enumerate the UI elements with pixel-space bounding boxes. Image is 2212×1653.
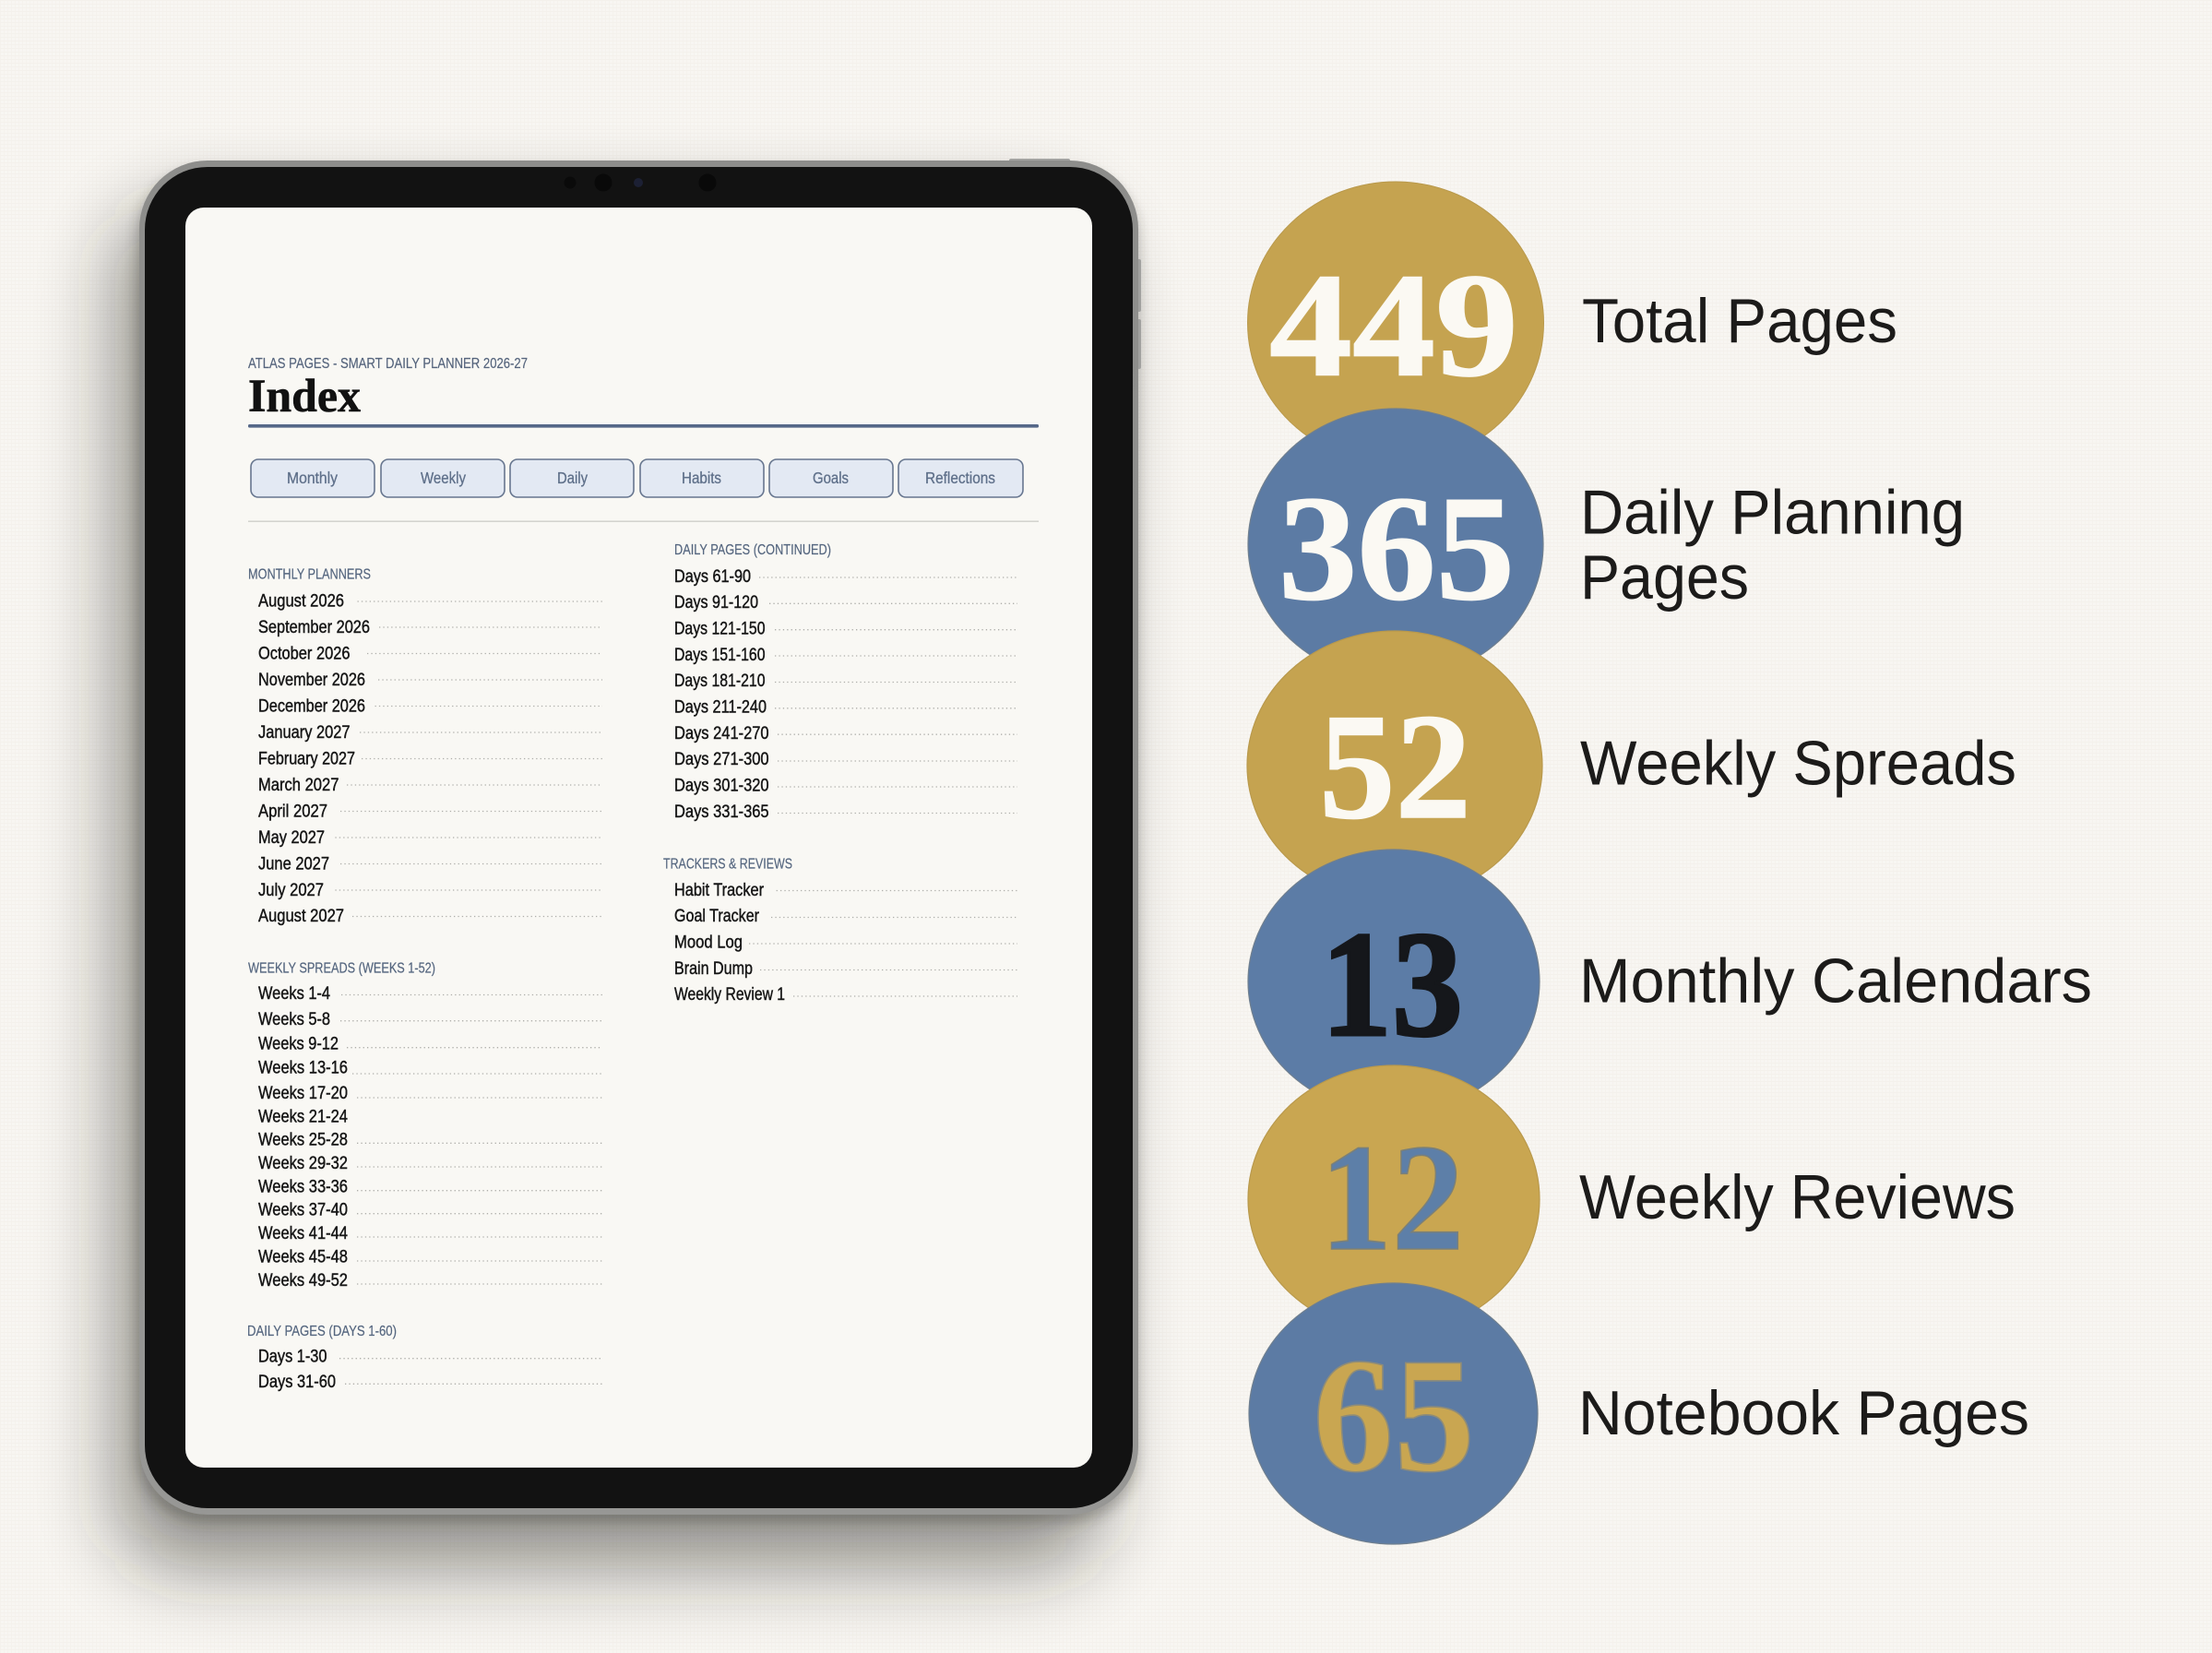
day rows: Days 61-90 [674, 567, 751, 587]
month rows: July 2027 [258, 881, 324, 900]
header rule [248, 424, 1039, 428]
number 65: 65 [1313, 1324, 1475, 1506]
section: weekly spreads [248, 961, 602, 1290]
number 13: 13 [1321, 901, 1463, 1068]
month rows: June 2027 [258, 854, 329, 874]
tracker rows: Mood Log [674, 934, 743, 952]
stat: 449 total pages [1247, 182, 1897, 464]
number 52: 52 [1319, 684, 1471, 850]
month rows: January 2027 [258, 723, 351, 743]
stat: 65 notebook pages [1249, 1283, 2029, 1544]
tab: Reflections: Reflections [925, 469, 995, 487]
week rows: Weeks 25-28 [258, 1131, 348, 1150]
week rows: Weeks 33-36 [258, 1177, 348, 1196]
month rows: December 2026 [258, 696, 365, 716]
label: Total Pages [1582, 286, 1897, 356]
aluminium frame [139, 161, 1138, 1515]
number 449: 449 [1269, 244, 1518, 408]
top power button [1009, 159, 1070, 166]
week rows: Weeks 37-40 [258, 1201, 348, 1220]
index page content [247, 356, 1039, 1392]
day rows: Days 301-320 [674, 777, 769, 795]
week rows: Weeks 17-20 [258, 1084, 348, 1103]
tablet drop shadow [115, 170, 1138, 1568]
tab: Monthly [251, 459, 375, 497]
header: planner name: ATLAS PAGES - SMART DAILY PLANNER 2026-27 [248, 356, 528, 372]
week rows: Weeks 13-16 [258, 1059, 348, 1077]
month rows: April 2027 [258, 802, 327, 821]
gold badge [1247, 631, 1542, 900]
tracker rows [674, 881, 1017, 1005]
section: daily pages continued [674, 542, 1017, 822]
day rows: Days 1-30 [258, 1347, 327, 1367]
tab: Goals: Goals [813, 469, 849, 487]
month rows [258, 592, 602, 926]
month rows: August 2026 [258, 592, 344, 611]
number 365: 365 [1278, 466, 1515, 632]
label: Weekly Spreads [1580, 729, 2016, 799]
tab: Reflections [898, 459, 1023, 497]
volume button up [1136, 259, 1141, 312]
title: Index: Index [248, 371, 361, 422]
day rows [258, 1347, 602, 1392]
day rows: Days 331-365 [674, 803, 769, 822]
week rows [258, 984, 602, 1290]
month rows: March 2027 [258, 776, 339, 795]
day rows: Days 31-60 [258, 1373, 336, 1392]
label, two lines: Pages [1580, 542, 1749, 612]
stat: 365 daily planning pages [1248, 409, 1965, 680]
week rows: Weeks 49-52 [258, 1271, 348, 1290]
section heading: WEEKLY SPREADS (WEEKS 1-52) [248, 961, 435, 976]
label: Weekly Reviews [1579, 1162, 2016, 1232]
week rows: Weeks 5-8 [258, 1010, 330, 1029]
section heading: DAILY PAGES (CONTINUED) [674, 542, 831, 558]
volume button down [1136, 319, 1141, 369]
week rows: Weeks 45-48 [258, 1248, 348, 1267]
tab: Weekly [381, 459, 505, 497]
week rows: Weeks 29-32 [258, 1154, 348, 1173]
tab: Goals [769, 459, 893, 497]
month rows: September 2026 [258, 618, 370, 637]
month rows: May 2027 [258, 828, 325, 848]
week rows: Weeks 1-4 [258, 984, 330, 1004]
section: daily pages days 1-60 [247, 1324, 602, 1392]
label: Monthly Calendars [1579, 946, 2092, 1017]
month rows: August 2027 [258, 907, 344, 926]
number 12: 12 [1320, 1112, 1464, 1282]
camera array [565, 173, 716, 192]
section: trackers and reviews [663, 856, 1017, 1005]
day rows: Days 211-240 [674, 697, 767, 718]
month rows: October 2026 [258, 644, 351, 664]
week rows: Weeks 9-12 [258, 1034, 339, 1053]
label: Notebook Pages [1578, 1378, 2029, 1448]
blue badge [1249, 1283, 1538, 1544]
label, two lines: Daily Planning [1580, 477, 1965, 547]
blue badge [1248, 409, 1543, 680]
screen [185, 208, 1092, 1468]
stat: 52 weekly spreads [1247, 631, 2016, 900]
day rows: Days 121-150 [674, 620, 766, 638]
content divider [248, 520, 1039, 522]
section heading: MONTHLY PLANNERS [248, 566, 371, 583]
day rows: Days 151-160 [674, 646, 766, 665]
day rows: Days 241-270 [674, 724, 769, 743]
tracker rows: Goal Tracker [674, 907, 760, 926]
gold badge [1248, 1065, 1540, 1333]
day rows: Days 271-300 [674, 750, 769, 769]
tab: Monthly: Monthly [287, 469, 338, 487]
day rows: Days 91-120 [674, 593, 758, 612]
black bezel [145, 167, 1133, 1508]
week rows: Weeks 41-44 [258, 1224, 348, 1243]
tracker rows: Brain Dump [674, 959, 753, 979]
stat: 13 monthly calendars [1248, 850, 2092, 1113]
day rows: Days 181-210 [674, 672, 766, 691]
section heading: DAILY PAGES (DAYS 1-60) [247, 1324, 397, 1339]
month rows: February 2027 [258, 749, 355, 768]
day rows [674, 567, 1017, 822]
tab: Habits [640, 459, 764, 497]
tracker rows: Weekly Review 1 [674, 985, 785, 1005]
navigation tabs [251, 459, 1023, 497]
month rows: November 2026 [258, 671, 365, 690]
section heading: TRACKERS & REVIEWS [663, 856, 792, 873]
tab: Habits: Habits [682, 469, 721, 487]
tab: Daily: Daily [557, 469, 588, 487]
week rows: Weeks 21-24 [258, 1108, 348, 1127]
tracker rows: Habit Tracker [674, 881, 765, 900]
stat: 12 weekly reviews [1248, 1065, 2016, 1333]
label, two lines [1580, 477, 1965, 612]
tab: Weekly: Weekly [421, 469, 466, 487]
tablet device [115, 159, 1141, 1568]
gold badge [1247, 182, 1544, 464]
tab: Daily [510, 459, 634, 497]
section: monthly planners [248, 566, 602, 926]
blue badge [1248, 850, 1540, 1113]
